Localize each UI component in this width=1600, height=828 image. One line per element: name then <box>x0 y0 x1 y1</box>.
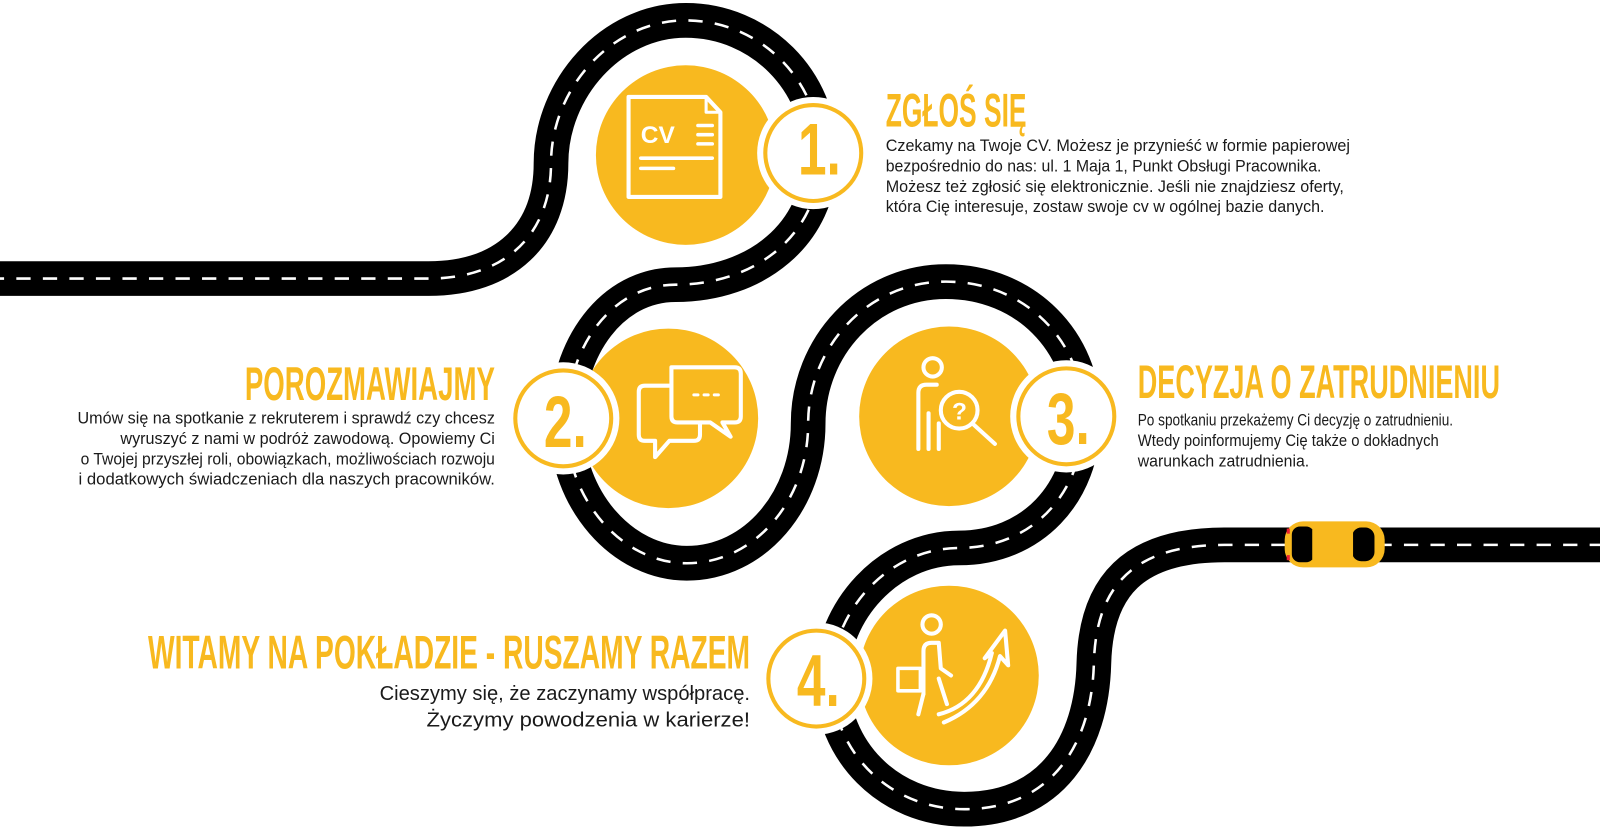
icon: person with magnifier <box>918 358 995 449</box>
icon: person with magnifier: ? <box>952 398 967 425</box>
text 2: i dodatkowych świadczeniach dla naszych pracowników. <box>79 471 495 489</box>
number 1: 1. <box>798 107 841 190</box>
number 1 <box>757 97 869 209</box>
text 1: która Cię interesuje, zostaw swoje cv w ogólnej bazie danych. <box>886 198 1324 216</box>
step 3 circle with person/magnifier icon <box>859 327 1039 506</box>
text 4: Cieszymy się, że zaczynamy współpracę. <box>380 683 750 705</box>
icon: CV document: CV <box>641 122 675 149</box>
step 1 circle with CV icon <box>596 65 776 245</box>
text 4 <box>380 683 750 732</box>
text 3: Wtedy poinformujemy Cię także o dokładnych <box>1138 432 1439 450</box>
text 1: Czekamy na Twoje CV. Możesz je przynieść w formie papierowej <box>886 137 1350 155</box>
text 3: warunkach zatrudnienia. <box>1137 452 1309 470</box>
text 1: bezpośrednio do nas: ul. 1 Maja 1, Punkt Obsługi Pracownika. <box>886 157 1321 175</box>
text 2 <box>78 409 495 489</box>
icon: chat bubbles <box>639 367 741 457</box>
text 3 <box>1137 412 1453 470</box>
number 4 <box>760 622 872 735</box>
number 3 <box>1010 360 1122 472</box>
number 2: 2. <box>544 380 587 463</box>
text 2: Umów się na spotkanie z rekruterem i sprawdź czy chcesz <box>78 409 495 427</box>
car <box>1285 521 1385 567</box>
heading 2: POROZMAWIAJMY <box>245 358 495 410</box>
icon: person climbing with arrow <box>898 615 1008 722</box>
heading 1: ZGŁOŚ SIĘ <box>886 85 1027 137</box>
text 1 <box>886 137 1350 216</box>
number 4: 4. <box>797 639 840 722</box>
number 3: 3. <box>1047 377 1090 460</box>
icon: CV document <box>629 97 720 197</box>
text 1: Możesz też zgłosić się elektronicznie. Jeśli nie znajdziesz oferty, <box>886 178 1344 196</box>
step 4 circle with climbing icon <box>859 586 1039 765</box>
text 2: wyruszyć z nami w podróż zawodową. Opowiemy Ci <box>119 430 495 448</box>
heading 4: WITAMY NA POKŁADZIE - RUSZAMY RAZEM <box>148 626 750 678</box>
text 3: Po spotkaniu przekażemy Ci decyzję o zatrudnieniu. <box>1138 412 1453 430</box>
text 2: o Twojej przyszłej roli, obowiązkach, możliwościach rozwoju <box>81 450 495 468</box>
number 2 <box>507 362 619 474</box>
step 2 circle with chat icon <box>579 329 758 508</box>
text 4: Życzymy powodzenia w karierze! <box>427 709 750 732</box>
